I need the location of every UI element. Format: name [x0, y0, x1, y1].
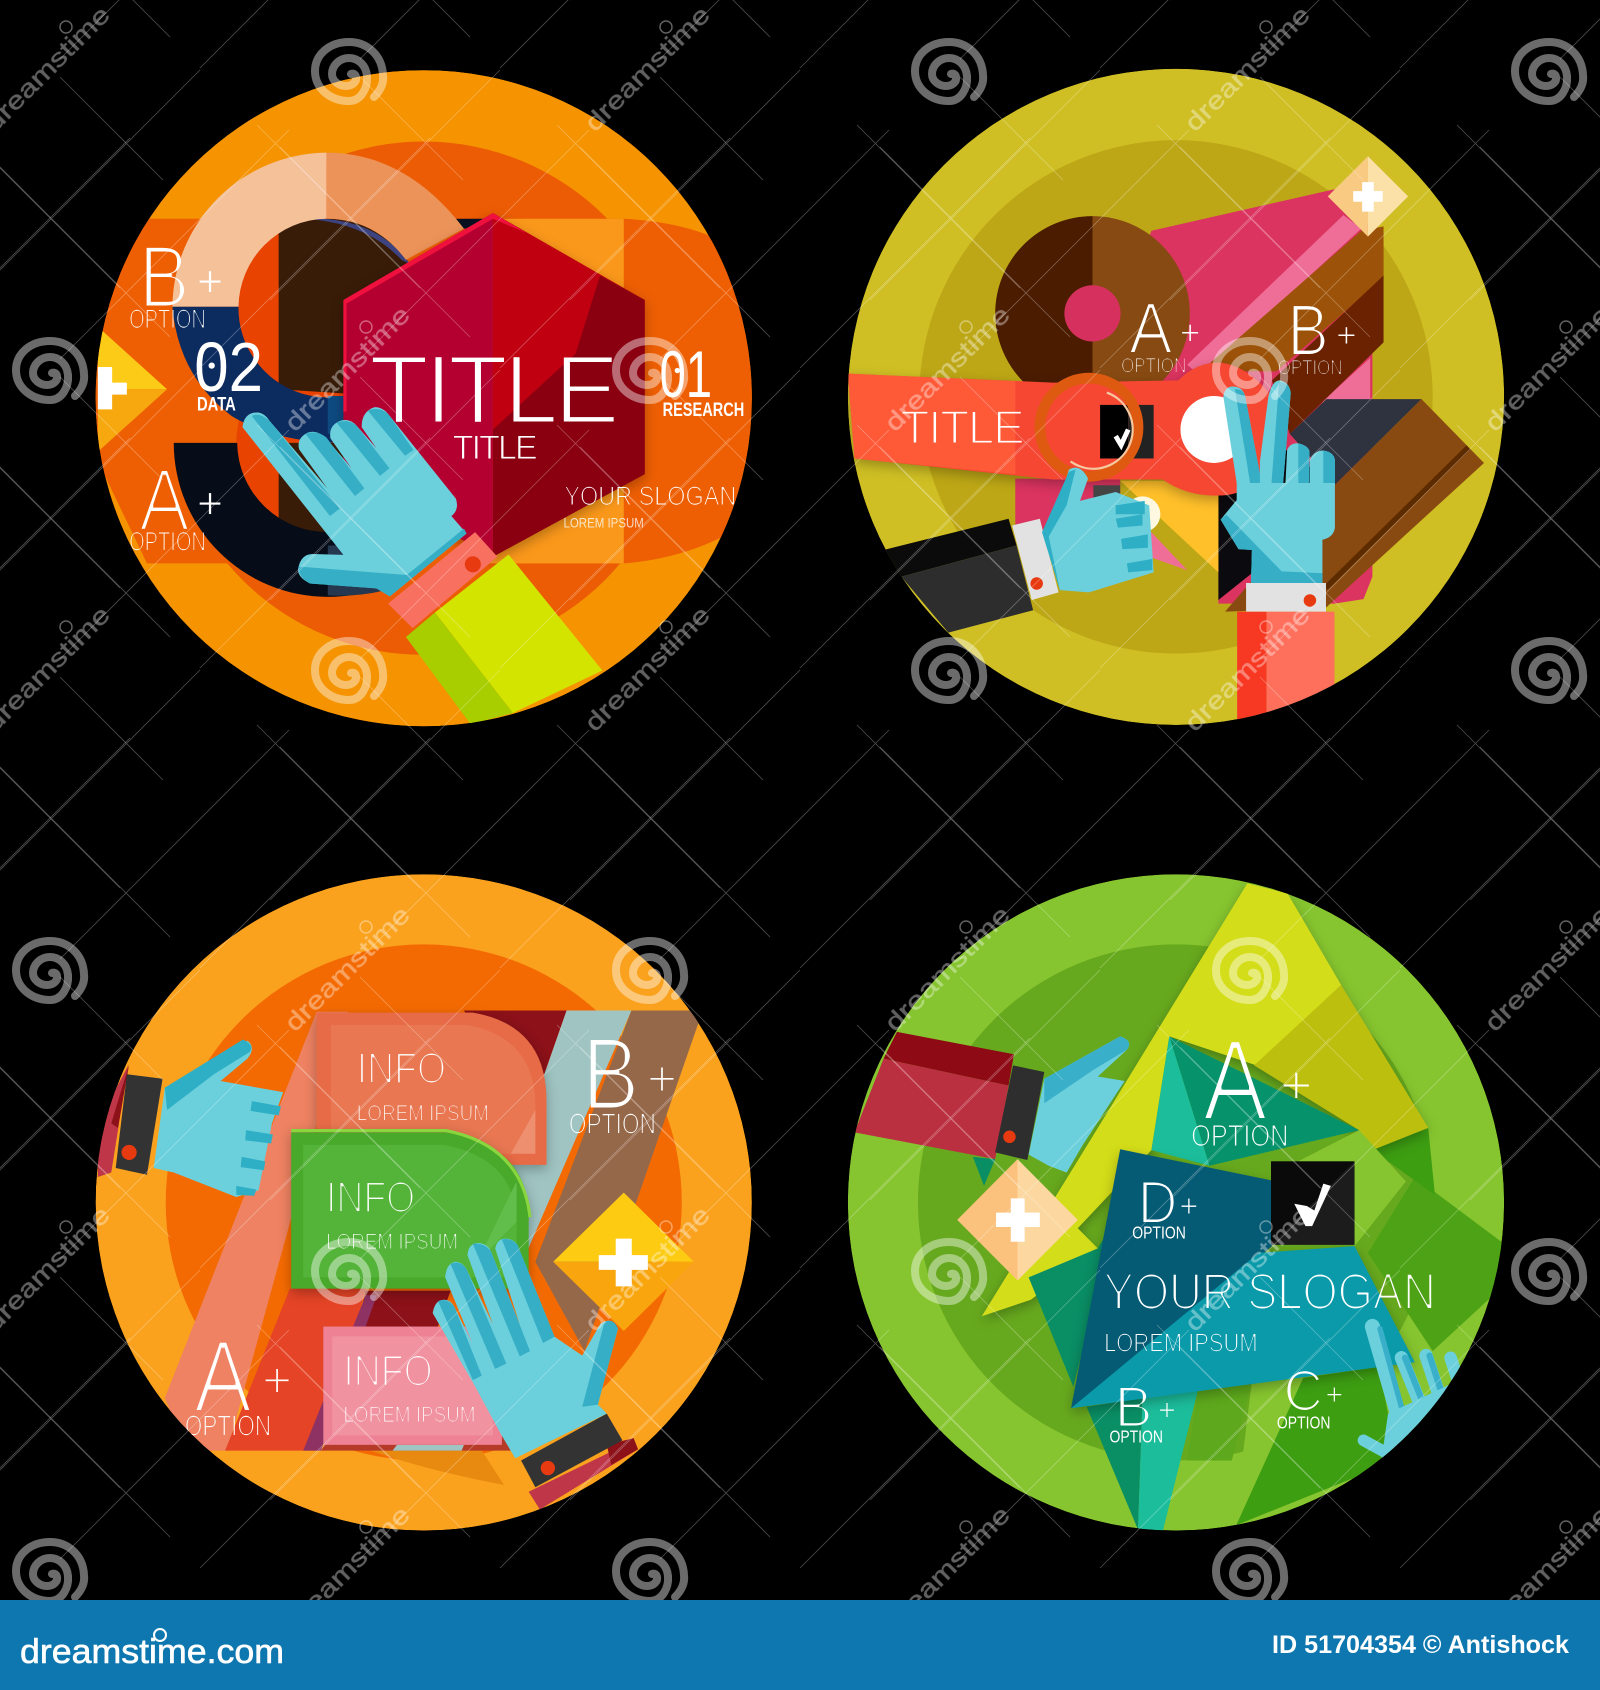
watermark: dreamstime text: dreamstime: [279, 301, 416, 437]
panel: orange info cards circle: [96, 874, 752, 1531]
text: 01 research: [661, 350, 744, 416]
watermark: dreamstime text: dreamstime: [879, 901, 1016, 1037]
footer logo: dreamstime.com: [20, 1633, 284, 1671]
text: D+ option: D: [1138, 1168, 1177, 1236]
red title banner: [848, 363, 1281, 496]
card: green info: LOREM IPSUM: [326, 1229, 458, 1254]
text: 01 research: RESEARCH: [663, 399, 744, 421]
text: C+ option: [1277, 1359, 1343, 1432]
hexagon: [343, 213, 645, 557]
text: A+ option: [130, 471, 220, 550]
watermark: dreamstime text: dreamstime: [1179, 1, 1316, 137]
left arm with hand: [855, 1032, 1129, 1186]
text: A+ option: +: [262, 1352, 292, 1409]
watermark: dreamstime text: dreamstime: [279, 901, 416, 1037]
black check box: [1100, 405, 1154, 458]
watermark: dreamstime text: dreamstime: [1479, 301, 1600, 437]
chart: S-shaped ring: [172, 153, 484, 597]
watermark: dreamstime text: dreamstime: [279, 1501, 416, 1637]
text: D+ option: OPTION: [1132, 1223, 1186, 1243]
text: C+ option: +: [1326, 1379, 1343, 1412]
watermark: dreamstime text: dreamstime: [579, 1, 716, 137]
text: B+ option: [130, 248, 220, 328]
text: B+ option: B: [1288, 290, 1329, 371]
magnifier ring: [1040, 378, 1144, 499]
lower green spikes: [1187, 1128, 1504, 1525]
text: title: TITLE: [901, 401, 1025, 454]
disc: [995, 216, 1190, 383]
text: A+ option: A: [194, 1319, 252, 1433]
text: D+ option: [1132, 1168, 1198, 1243]
brown ribbons: [1120, 226, 1484, 612]
icon: yellow plus arrow: [98, 327, 167, 452]
footer credit: ID 51704354 © Antishock: [1272, 1631, 1569, 1659]
panel: green slogan circle: [848, 874, 1504, 1532]
card: coral info: INFO: [357, 1045, 446, 1093]
text: A+ option: +: [1280, 1053, 1313, 1116]
text: B+ option: [570, 1040, 674, 1134]
lower teal spike: [1087, 1389, 1198, 1532]
watermark: dreamstime text: dreamstime: [879, 301, 1016, 437]
left arm with thumbs-up hand: [884, 468, 1160, 633]
text: A+ option: OPTION: [185, 1410, 271, 1442]
V-sign hand with cuff and red sleeve: [1221, 380, 1335, 729]
text: A+ option: +: [1180, 314, 1200, 353]
text: A+ option: [1191, 1017, 1313, 1153]
text: your slogan: LOREM IPSUM: [563, 515, 644, 531]
text: A+ option: A: [1129, 288, 1173, 369]
hand: pointing blue glove: [243, 407, 467, 596]
text: A+ option: [1122, 304, 1198, 372]
yellow-green triangle: [982, 883, 1428, 1316]
green shard: [1029, 1217, 1116, 1387]
text: 02 data: DATA: [197, 393, 236, 415]
shadow under stripes: [370, 1451, 504, 1485]
white disc: [1180, 396, 1233, 463]
text: B+ option: B: [1115, 1376, 1152, 1440]
text: B+ option: +: [647, 1050, 677, 1107]
text: your slogan: [1104, 1263, 1436, 1358]
text: C+ option: OPTION: [1277, 1412, 1330, 1432]
lower right hand: [1363, 1327, 1464, 1460]
footer bar: [0, 1600, 1600, 1690]
text: D+ option: +: [1180, 1188, 1198, 1224]
text: B+ option: +: [1336, 316, 1357, 355]
teal triangle: [1151, 1036, 1406, 1246]
text: B+ option: B: [582, 1017, 639, 1131]
card: green info: [291, 1131, 530, 1289]
text: A+ option: A: [139, 450, 190, 549]
text: your slogan: [563, 481, 736, 531]
text: B+ option: [1109, 1376, 1176, 1447]
text: B+ option: +: [197, 257, 223, 306]
text: B+ option: [1279, 306, 1354, 374]
text: your slogan: YOUR SLOGAN: [1104, 1263, 1436, 1320]
panel: olive magnifier circle: [848, 69, 1504, 729]
text: B+ option: OPTION: [129, 304, 206, 334]
watermark: dreamstime text: dreamstime: [579, 601, 716, 737]
watermark: dreamstime text: dreamstime: [1179, 601, 1316, 737]
text: B+ option: OPTION: [1278, 357, 1343, 380]
text: B+ option: OPTION: [1109, 1427, 1163, 1447]
right hand with cuff: [433, 1239, 638, 1510]
text: A+ option: A: [1203, 1017, 1268, 1144]
text: title: TITLE: [453, 429, 538, 467]
text: your slogan: YOUR SLOGAN: [564, 481, 736, 511]
diagonal stripes: [165, 1010, 703, 1451]
card: coral info: [317, 1013, 547, 1165]
text: A+ option: OPTION: [129, 526, 206, 556]
text: 02 data: 02: [194, 328, 263, 406]
main slogan polygon: [1071, 1149, 1415, 1408]
text: A+ option: [186, 1342, 289, 1436]
card: green info: INFO: [326, 1174, 415, 1222]
sleeve and cuff: [388, 532, 602, 724]
watermark: dreamstime text: dreamstime: [1479, 901, 1600, 1037]
watermark: dreamstime text: dreamstime: [1479, 1501, 1600, 1637]
card: coral info: LOREM IPSUM: [357, 1100, 489, 1125]
text: B+ option: B: [139, 227, 190, 326]
icon: check box: [1271, 1161, 1355, 1245]
text: title: TITLE: [369, 335, 619, 444]
card: pink info: [323, 1327, 502, 1445]
card: pink info: LOREM IPSUM: [343, 1402, 476, 1427]
text: B+ option: +: [1158, 1394, 1176, 1427]
icon: plus diamond peach: [957, 1159, 1078, 1281]
text: title: [372, 357, 614, 458]
icon: plus diamond: [1328, 156, 1408, 237]
text: C+ option: C: [1284, 1359, 1323, 1423]
text: your slogan: LOREM IPSUM: [1104, 1328, 1258, 1358]
text: A+ option: +: [197, 479, 223, 528]
text: 02 data: [196, 342, 260, 410]
icon: plus diamond yellow: [553, 1193, 694, 1331]
pink backdrop: [1015, 189, 1372, 604]
panel: orange hexagon title circle: [93, 70, 759, 726]
text: 01 research: 01: [659, 338, 712, 412]
watermark: dreamstime text: dreamstime: [1179, 1201, 1316, 1337]
watermark: dreamstime text: dreamstime: [579, 1201, 716, 1337]
left hand with cuff: [98, 1039, 283, 1197]
text: B+ option: OPTION: [569, 1109, 656, 1141]
watermark: dreamstime text: dreamstime: [879, 1501, 1016, 1637]
text: A+ option: OPTION: [1121, 354, 1186, 377]
text: A+ option: OPTION: [1191, 1120, 1288, 1153]
card: pink info: INFO: [343, 1347, 433, 1395]
